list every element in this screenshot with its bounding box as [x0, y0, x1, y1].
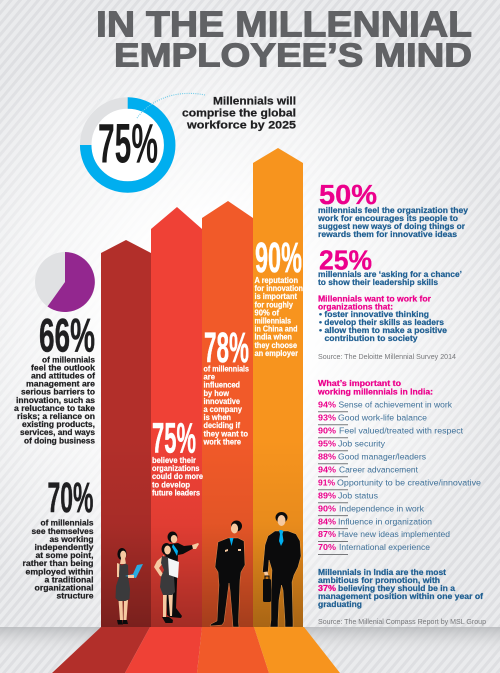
- stat: 66%: serious barriers to: [21, 388, 95, 397]
- stat: 70%: as working: [50, 535, 94, 544]
- stat: 75% red column: 75%: [152, 414, 196, 462]
- percentages: 84%: [318, 516, 336, 526]
- percentages: 89%: [318, 490, 336, 500]
- text: what millennials want: • allow them to make a positive: [319, 326, 447, 335]
- text: ambition for promotion: 37%: [318, 584, 337, 593]
- text: ambition for promotion: graduating: [318, 600, 362, 609]
- stat: 70%: at some point,: [36, 551, 94, 560]
- labels: Opportunity to be creative/innovative: [337, 478, 481, 488]
- text: what millennials want: [318, 294, 447, 343]
- pie chart: 66%: [35, 252, 95, 312]
- figure: man and woman talking: [154, 532, 199, 623]
- stat: 90% amber column: 90% of: [254, 308, 279, 317]
- stat: 90% amber column: in China and: [254, 325, 298, 334]
- stat: 90% amber column: millennials: [254, 316, 291, 326]
- stat: 90% amber column: for innovation: [254, 284, 303, 293]
- text: global workforce: comprise the global: [182, 108, 296, 120]
- stat: 90% amber column: they choose: [254, 341, 297, 350]
- stat: 75% red column: believe their: [152, 456, 197, 465]
- stat: 66%: of doing business: [24, 436, 95, 445]
- stat: 78% orange column: they want to: [204, 429, 248, 438]
- heading: what's important: [317, 379, 433, 396]
- stat: 25%: 25%: [319, 244, 372, 276]
- donut chart: 75%: [86, 103, 170, 187]
- stat: 75% red column: could do more: [152, 472, 203, 481]
- labels: Sense of achievement in work: [338, 400, 453, 410]
- stat: 66%: [14, 308, 95, 445]
- text: global workforce: Millennials will: [213, 96, 296, 108]
- row dividers: [318, 412, 348, 554]
- stat: 78% orange column: innovative: [204, 397, 240, 406]
- labels: Good manager/leaders: [338, 452, 426, 462]
- text: what millennials want: contribution to society: [324, 334, 418, 343]
- stat: 78% orange column: of millennials: [204, 364, 249, 374]
- stat: 70%: [22, 474, 94, 601]
- floor bands: [52, 627, 340, 673]
- stat: 25%: [318, 244, 462, 287]
- text: ambition for promotion: ambitious for promotion, with: [318, 576, 440, 585]
- stat: 66%: feel the outlook: [31, 363, 95, 372]
- text: what millennials want: organizations that:: [318, 302, 393, 311]
- stat: 66%: management are: [26, 380, 95, 389]
- stat: 50%: rewards them for innovative ideas: [318, 230, 457, 239]
- stat: 50%: work for encourages its people to: [317, 214, 458, 223]
- stat: 78% orange column: are: [204, 373, 215, 382]
- column shading: [101, 440, 303, 627]
- percentages: 70%: [318, 542, 336, 552]
- stat: 70%: independently: [34, 543, 94, 552]
- stat: 70%: rather than being: [22, 559, 94, 568]
- stat: 70%: organizational: [34, 584, 94, 592]
- labels: Influence in organization: [338, 516, 432, 526]
- percentages: 94%: [318, 464, 336, 474]
- title: [96, 4, 472, 74]
- labels: Independence in work: [339, 503, 425, 513]
- text: ambition for promotion: [318, 568, 483, 609]
- stat: 90% amber column: A reputation: [254, 276, 298, 285]
- stat: 66%: a reluctance to take: [14, 404, 95, 413]
- stat: 70%: see themselves: [32, 527, 94, 536]
- arrow 2: red: [151, 207, 202, 627]
- figure: woman with laptop: [116, 548, 143, 624]
- stat: 50%: millennials feel the organization they: [318, 206, 468, 215]
- stat: 78% orange column: deciding if: [204, 421, 240, 430]
- arrow 3: orange: [202, 201, 253, 627]
- stat: 66%: and attitudes of: [31, 372, 95, 380]
- stat: 66%: 66%: [39, 308, 95, 362]
- percentages: [318, 400, 336, 552]
- stat: 50%: 50%: [319, 179, 377, 210]
- man pointing: [165, 532, 199, 618]
- arrow 4: amber: [253, 148, 303, 627]
- stat: 90% amber column: is important: [254, 292, 297, 301]
- stat: 50%: suggest new ways of doing things or: [318, 222, 466, 231]
- stat: 66%: existing products,: [22, 420, 95, 429]
- donut chart: 75%: 75%: [98, 112, 158, 174]
- stat: 90% amber column: India when: [254, 333, 292, 342]
- stat: 75% red column: organizations: [152, 464, 200, 473]
- stat: 75% red column: future leaders: [152, 488, 200, 497]
- figure: man with briefcase: [262, 512, 301, 627]
- stat: 78% orange column: work there: [203, 437, 241, 446]
- stat: 70%: a traditional: [44, 575, 94, 584]
- list: priorities in India: [318, 400, 481, 554]
- heading: what's important: What’s important to: [318, 379, 401, 388]
- labels: International experience: [339, 542, 430, 552]
- labels: Good work-life balance: [338, 412, 427, 422]
- text: global workforce: workforce by 2025: [186, 120, 296, 132]
- percentages: 93%: [318, 412, 336, 422]
- labels: [337, 400, 481, 552]
- stat: 66%: innovation, such as: [16, 396, 95, 405]
- stat: 90% amber column: 90%: [255, 234, 302, 282]
- stat: 66%: of millennials: [42, 355, 95, 364]
- percentages: 95%: [318, 438, 336, 448]
- stat: 66%: services, and ways: [20, 428, 95, 437]
- percentages: 90%: [318, 503, 336, 513]
- labels: Feel valued/treated with respect: [339, 426, 464, 436]
- dotted connector: [137, 93, 205, 118]
- percentages: 90%: [318, 426, 336, 436]
- title: EMPLOYEE’S MIND: [114, 38, 472, 74]
- labels: Job security: [338, 438, 386, 448]
- woman with papers: [154, 543, 179, 623]
- stat: 78% orange column: 78%: [204, 324, 249, 372]
- stat: 70%: employed within: [26, 567, 94, 576]
- stat: 90% amber column: [254, 234, 303, 358]
- stat: 70%: structure: [56, 592, 94, 601]
- heading: what's important: working millennials in India:: [317, 388, 433, 396]
- labels: Job status: [338, 490, 378, 500]
- labels: Career advancement: [339, 464, 419, 474]
- percentages: 94%: [318, 400, 336, 410]
- labels: Have new ideas implemented: [338, 529, 450, 539]
- percentages: 88%: [318, 452, 336, 462]
- arrow 1: dark red: [101, 240, 151, 627]
- stat: 75% red column: to develop: [152, 480, 190, 489]
- percentages: 87%: [318, 529, 336, 539]
- stat: 78% orange column: a company: [204, 405, 242, 414]
- text: ambition for promotion: Millennials in India are the most: [318, 568, 446, 577]
- stat: 78% orange column: by how: [204, 389, 230, 398]
- arrow columns: [101, 148, 303, 627]
- text: what millennials want: • foster innovative thinking: [319, 310, 429, 319]
- stat: 75% red column: [152, 414, 203, 497]
- figure: man with crossed arms: [210, 520, 245, 627]
- stat: 50%: [317, 179, 468, 239]
- source: Deloitte: Source: The Deloitte Millennial Survey 2014: [318, 352, 456, 361]
- text: ambition for promotion: believing they should be in a: [338, 584, 455, 593]
- percentages: 91%: [318, 478, 335, 488]
- text: global workforce: [182, 96, 296, 132]
- text: what millennials want: • develop their skills as leaders: [319, 318, 444, 327]
- text: ambition for promotion: management position within one year of: [318, 592, 483, 601]
- stat: 70%: 70%: [48, 474, 94, 522]
- stat: 78% orange column: influenced: [204, 381, 240, 390]
- stat: 66%: risks; a reliance on: [17, 412, 95, 421]
- stat: 25%: millennials are ‘asking for a chance’: [318, 270, 462, 279]
- stat: 90% amber column: for roughly: [254, 300, 293, 309]
- stat: 78% orange column: is when: [204, 413, 231, 422]
- stat: 25%: to show their leadership skills: [318, 278, 438, 287]
- stat: 78% orange column: [203, 324, 249, 446]
- stat: 90% amber column: an employer: [254, 349, 299, 358]
- stat: 70%: of millennials: [40, 519, 94, 528]
- title: IN THE MILLENNIAL: [96, 4, 472, 44]
- source: MSL Group: Source: The Millenial Compass Report by MSL Group: [318, 617, 486, 626]
- text: what millennials want: Millennials want to work for: [318, 294, 432, 304]
